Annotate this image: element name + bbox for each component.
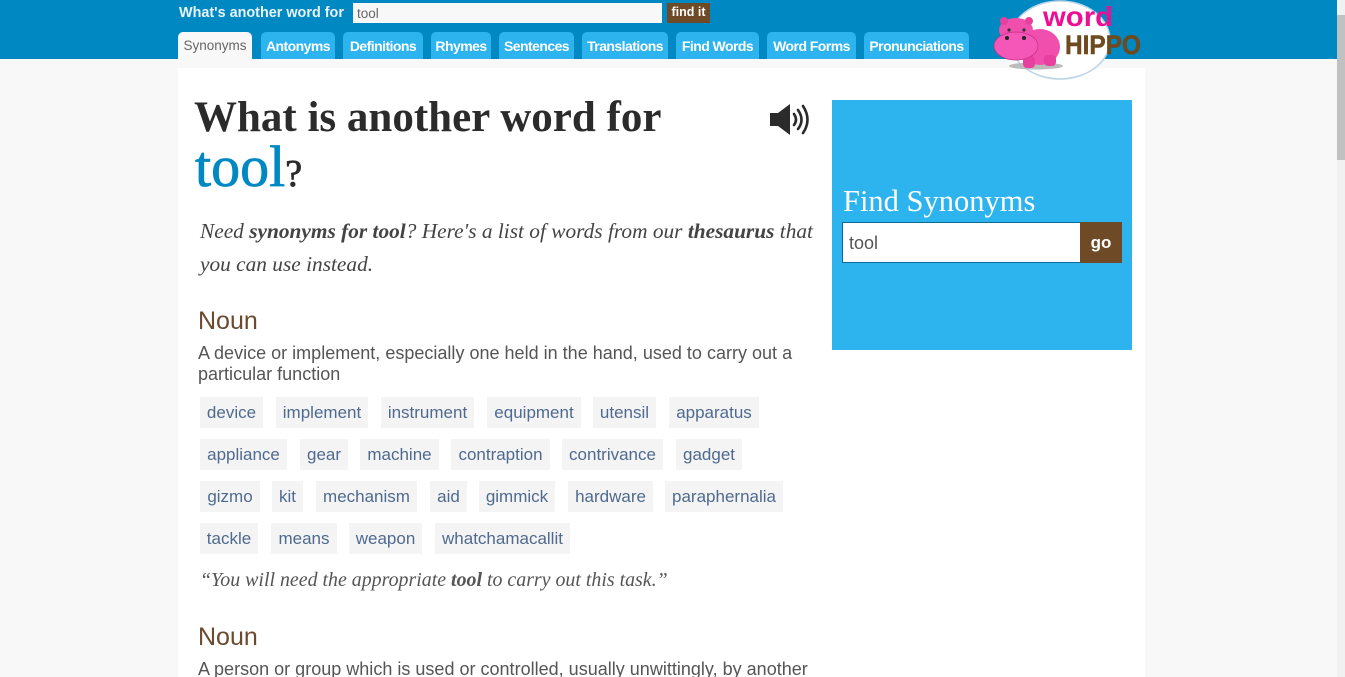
tab: Definitions — [343, 32, 423, 59]
synonym chips: implement — [283, 403, 361, 422]
synonym chips: equipment — [494, 403, 574, 422]
synonym chips: contrivance — [569, 445, 656, 464]
synonym chips: apparatus — [676, 403, 752, 422]
logo: word hippo — [994, 0, 1141, 80]
icon: speaker — [770, 104, 809, 135]
tab: Find Words — [676, 32, 759, 59]
synonym chips — [200, 397, 783, 554]
tab: Antonyms — [261, 32, 335, 59]
logo: word hippo: HIPPO — [1065, 30, 1141, 60]
logo: word hippo: word — [1042, 1, 1113, 32]
search input: tool — [849, 233, 878, 253]
find it button — [667, 3, 710, 23]
header search input — [353, 3, 662, 23]
synonym chips: contraption — [458, 445, 543, 464]
go button: go — [1091, 233, 1111, 252]
tab: Rhymes: Rhymes — [435, 38, 487, 54]
tab: Find Words: Find Words — [682, 38, 753, 54]
intro text: you can use instead. — [200, 252, 373, 276]
synonym chips: instrument — [388, 403, 467, 422]
tab: Synonyms: Synonyms — [183, 38, 247, 53]
synonym chips: gear — [307, 445, 341, 464]
tab: Pronunciations — [864, 32, 969, 59]
go button — [1080, 222, 1122, 263]
synonym chips: gizmo — [207, 487, 253, 506]
definition 1: particular function — [198, 364, 340, 384]
main white panel — [178, 68, 1145, 677]
header bar — [0, 0, 1337, 59]
tab: Definitions: Definitions — [350, 38, 416, 54]
page title: tool? — [195, 134, 302, 199]
tab: Sentences: Sentences — [504, 38, 569, 54]
synonym chips: gadget — [683, 445, 735, 464]
synonym chips: kit — [279, 487, 296, 506]
synonym chips: weapon — [356, 529, 415, 548]
tab: Translations — [582, 32, 668, 59]
tab: Synonyms — [178, 32, 252, 59]
tab: Translations: Translations — [587, 38, 663, 54]
scrollbar thumb — [1337, 15, 1345, 160]
synonym chips: mechanism — [323, 487, 410, 506]
synonym chips: hardware — [575, 487, 646, 506]
tab: Word Forms — [767, 32, 856, 59]
tab: Sentences — [499, 32, 574, 59]
scrollbar — [1337, 0, 1345, 677]
intro text — [198, 219, 814, 276]
synonym chips: device — [207, 403, 256, 422]
synonym chips: aid — [437, 487, 460, 506]
navigation tabs — [178, 32, 969, 59]
synonym chips: gimmick — [486, 487, 548, 506]
definition 1 — [198, 343, 792, 384]
heading: noun 1: Noun — [198, 307, 258, 335]
tab: Pronunciations: Pronunciations — [869, 38, 964, 54]
intro text: Need synonyms for tool? Here's a list of words from our thesaurus that — [200, 219, 813, 243]
synonym chips: whatchamacallit — [442, 529, 563, 548]
synonym chips: utensil — [600, 403, 649, 422]
definition 1: A device or implement, especially one held in the hand, used to carry out a — [198, 343, 792, 363]
synonym chips: paraphernalia — [672, 487, 776, 506]
header search label: What's another word for — [179, 5, 344, 21]
find synonyms heading: Find Synonyms — [843, 184, 1035, 218]
synonym chips: appliance — [207, 445, 280, 464]
synonym chips: tackle — [207, 529, 251, 548]
synonym chips: machine — [367, 445, 432, 464]
synonym chips: means — [278, 529, 330, 548]
tab: Rhymes — [431, 32, 491, 59]
header search input: tool — [357, 6, 379, 21]
search input — [842, 222, 1087, 263]
tab: Antonyms: Antonyms — [266, 38, 330, 54]
example sentence: “You will need the appropriate tool to carry out this task.” — [200, 569, 668, 591]
tab: Word Forms: Word Forms — [773, 38, 850, 54]
page title: What is another word for — [194, 94, 661, 141]
page title — [194, 94, 661, 199]
heading: noun 2: Noun — [198, 623, 258, 651]
panel: find synonyms — [832, 100, 1132, 350]
find it button: find it — [671, 5, 706, 19]
